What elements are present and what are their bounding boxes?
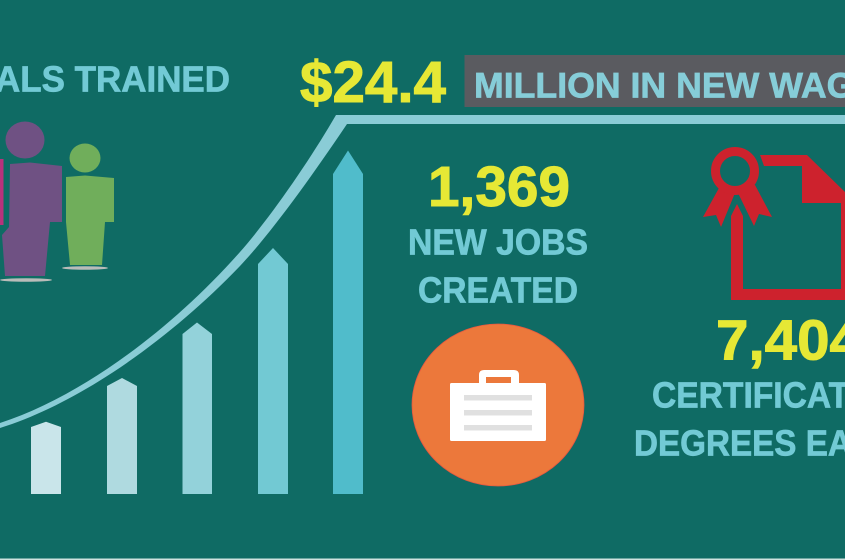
growth curve line <box>0 115 845 428</box>
jobs count: 1,369 <box>428 155 570 219</box>
bar 4 <box>258 248 288 494</box>
bar chart: rising arrows <box>31 150 363 494</box>
icon: briefcase in orange circle <box>412 324 584 486</box>
icon: people figures <box>0 122 114 282</box>
jobs label: NEW JOBS <box>408 222 588 262</box>
seal ring <box>716 152 754 190</box>
heading: individuals trained: ALS TRAINED <box>0 58 230 100</box>
ribbon tails <box>703 186 735 227</box>
bar 3 <box>182 322 212 494</box>
wage figure: $24.4 <box>300 50 446 115</box>
document outline <box>760 155 845 203</box>
icon: certificate with ribbon <box>703 152 845 300</box>
certificates label <box>634 374 845 464</box>
bar 1 <box>31 422 61 494</box>
figure: green <box>62 144 114 270</box>
figure: purple <box>0 122 62 282</box>
bar 5 <box>333 150 363 494</box>
figure: pink (clipped) <box>0 159 4 225</box>
jobs label <box>408 222 588 310</box>
jobs label: CREATED <box>418 270 578 310</box>
bar 2 <box>107 378 137 494</box>
